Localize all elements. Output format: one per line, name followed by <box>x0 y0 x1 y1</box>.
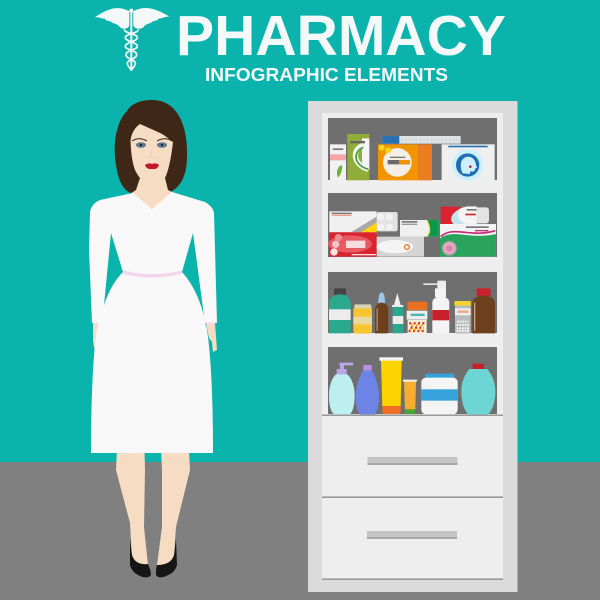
green box <box>347 134 369 180</box>
drawer bottom <box>322 498 503 580</box>
green white box <box>400 220 439 237</box>
white box with head icon <box>442 144 495 181</box>
face and neck <box>130 124 176 209</box>
orange box <box>378 144 432 180</box>
green bottle <box>329 288 351 333</box>
yellow jar <box>353 304 372 334</box>
upper shelves: boxes <box>328 134 496 257</box>
subtitle: INFOGRAPHIC ELEMENTS <box>205 65 448 85</box>
legs <box>116 450 190 566</box>
cabinet <box>308 101 518 592</box>
drawer top <box>322 414 503 498</box>
red box <box>328 232 377 257</box>
gray box <box>377 237 424 257</box>
shelf backs <box>328 118 497 414</box>
thermometer strip <box>382 136 461 144</box>
white yellow box <box>329 211 377 232</box>
cabinet inner panel <box>322 113 503 416</box>
hands <box>93 323 217 352</box>
hair <box>115 100 187 194</box>
dress armpit gaps <box>104 233 204 316</box>
lower shelves: bottles <box>329 281 495 414</box>
shoes <box>130 539 177 577</box>
white jar blue band <box>421 374 458 414</box>
yellow tube <box>379 357 403 414</box>
woman pharmacist <box>89 100 217 577</box>
pill jar <box>454 301 471 333</box>
blue bottle <box>356 365 379 414</box>
face features <box>132 139 172 169</box>
floor <box>0 462 600 600</box>
teal bottle <box>461 364 495 414</box>
cabinet frame <box>308 101 518 592</box>
green wave box <box>440 224 496 257</box>
white dress <box>89 192 217 453</box>
title: PHARMACY <box>176 4 506 67</box>
small orange tube <box>403 380 417 414</box>
belt <box>123 272 182 276</box>
cuffs <box>93 322 215 325</box>
pill box <box>407 302 427 333</box>
icon: caduceus <box>95 8 169 71</box>
brown dropper bottle <box>375 292 388 333</box>
pump bottle <box>329 363 355 414</box>
big brown bottle <box>472 288 495 333</box>
blister pack left <box>377 212 398 231</box>
red box and blister right <box>441 206 489 225</box>
nasal spray <box>392 293 403 333</box>
small white box <box>330 144 346 180</box>
white spray bottle <box>423 281 449 333</box>
